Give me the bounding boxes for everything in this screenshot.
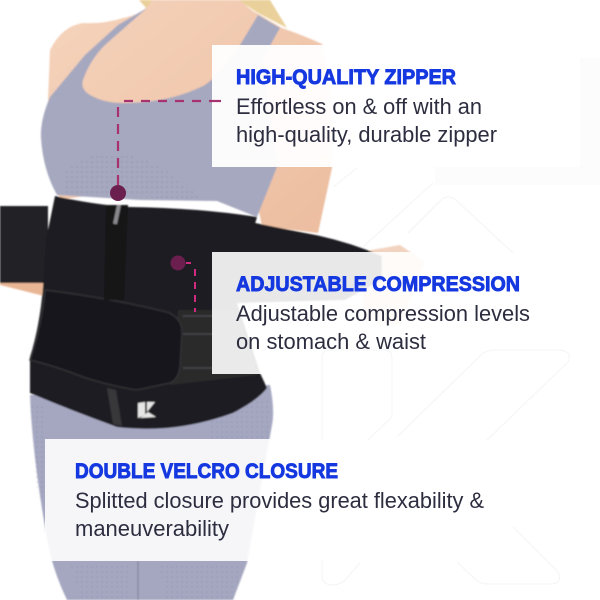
photo: woman wearing waist trainer xyxy=(0,0,425,600)
text block: high-quality zipper xyxy=(236,65,497,147)
velcro strips xyxy=(170,310,258,385)
zipper dot xyxy=(110,185,126,201)
heading: HIGH-QUALITY ZIPPER xyxy=(236,65,456,89)
leggings inner line xyxy=(137,561,139,600)
panel: adjustable compression xyxy=(212,252,580,374)
leggings knit pattern xyxy=(31,400,268,600)
left belt strap xyxy=(0,206,48,283)
panel: double velcro closure xyxy=(45,439,545,561)
heading: DOUBLE VELCRO CLOSURE xyxy=(75,459,338,483)
lower left arm xyxy=(0,278,50,296)
hair xyxy=(139,0,287,28)
description line 2: on stomach & waist xyxy=(236,329,426,354)
text block: double velcro closure xyxy=(75,459,484,541)
zipper tape xyxy=(104,205,128,300)
description line 1: Adjustable compression levels xyxy=(236,301,530,326)
connector: zipper, bottom part on photo xyxy=(110,101,212,201)
dash stub over zipper panel xyxy=(212,100,221,102)
zipper pull xyxy=(115,205,119,224)
hand behind panel xyxy=(360,245,425,325)
text block: adjustable compression xyxy=(236,272,530,354)
lower zipper xyxy=(107,388,122,426)
description line 2: maneuverability xyxy=(75,516,229,541)
leggings xyxy=(30,385,273,600)
zipper dashed vertical line xyxy=(117,107,119,185)
tank top knit pattern xyxy=(63,153,205,200)
description line 1: Splitted closure provides great flexability & xyxy=(75,488,484,513)
K logo on belt xyxy=(138,402,156,418)
panel: high-quality zipper xyxy=(212,45,580,167)
skin: chest, neck and shoulders xyxy=(48,0,332,233)
decorative faint panel xyxy=(435,58,600,185)
right belt strap xyxy=(237,221,382,303)
tank top xyxy=(41,8,280,217)
heading: ADJUSTABLE COMPRESSION xyxy=(236,272,520,296)
watermark K logo xyxy=(322,168,569,585)
description line 2: high-quality, durable zipper xyxy=(236,122,497,147)
zipper dashed horizontal line xyxy=(124,100,212,102)
connector: compression xyxy=(170,256,195,312)
compression dashed line xyxy=(186,263,195,312)
velcro closure flap xyxy=(30,290,182,390)
compression dot xyxy=(170,256,186,270)
description line 1: Effortless on & off with an xyxy=(236,94,482,119)
waist belt body xyxy=(30,196,267,429)
